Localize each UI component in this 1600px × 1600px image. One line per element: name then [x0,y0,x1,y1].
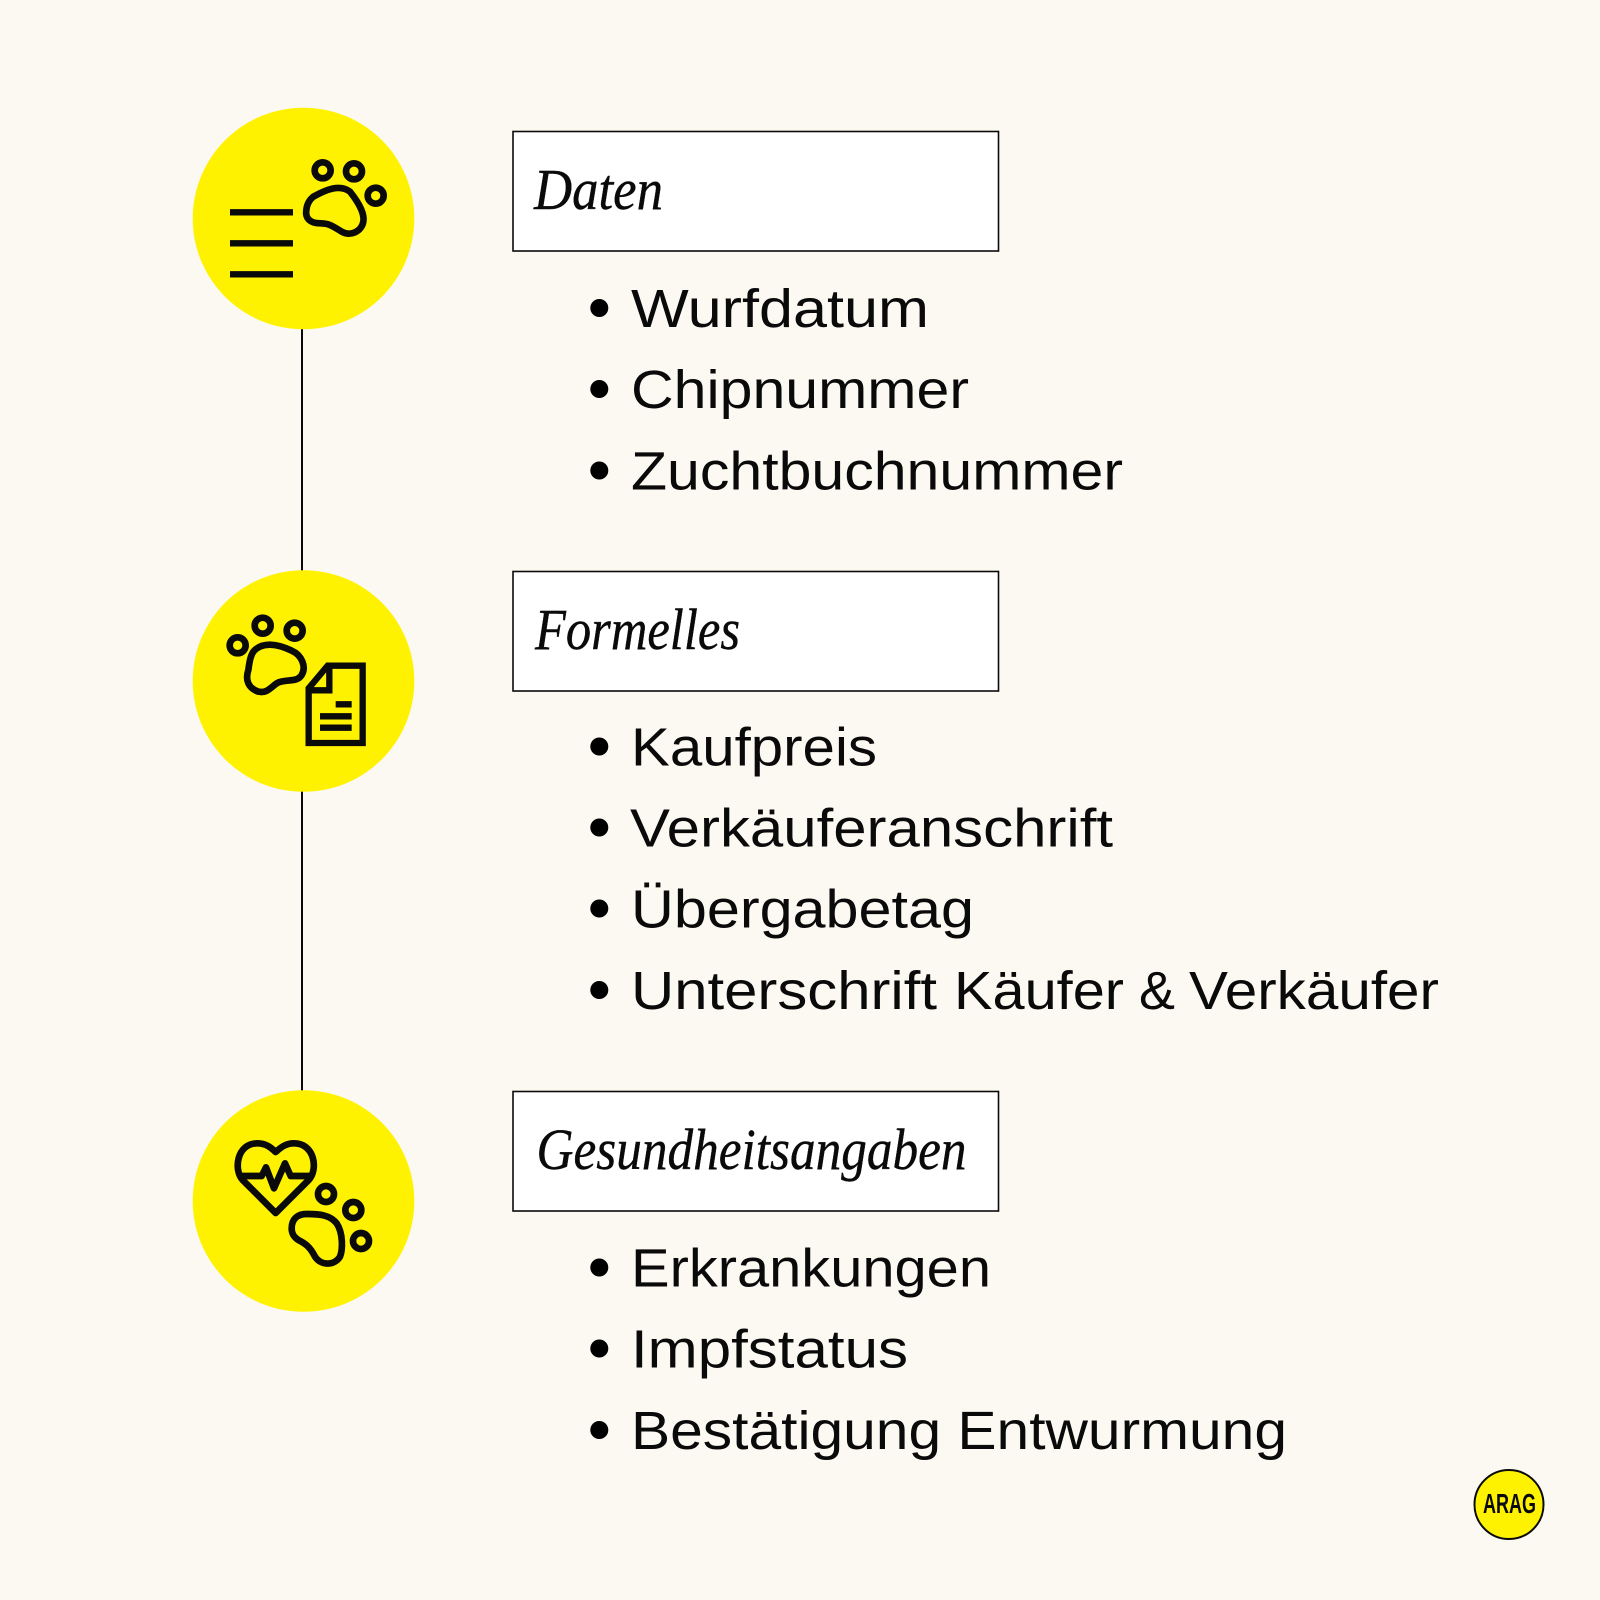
list: Gesundheitsangaben: Erkrankungen [631,1238,991,1298]
icon: paw with document [193,570,414,792]
list: Daten: Wurfdatum [631,279,929,339]
list: Daten [590,279,1123,502]
panel: Daten [193,108,1123,501]
list: Daten: Chipnummer [631,360,969,420]
heading box: Daten: Daten [533,157,663,222]
list: Gesundheitsangaben [590,1238,1287,1461]
list: Gesundheitsangaben: Bestätigung Entwurmung [631,1401,1287,1461]
panel: Gesundheitsangaben [193,1090,1287,1461]
list: Formelles: Übergabetag [631,880,974,940]
logo: ARAG [1474,1470,1544,1539]
heading box: Daten [513,132,998,251]
list: Formelles [590,718,1439,1021]
heading box: Gesundheitsangaben [513,1092,998,1211]
icon: heart with paw [193,1090,414,1312]
icon: list with paw [193,108,414,329]
heading box: Gesundheitsangaben: Gesundheitsangaben [536,1117,966,1182]
heading box: Formelles [513,572,998,691]
list: Gesundheitsangaben: Impfstatus [631,1320,908,1380]
list: Formelles: & [1139,961,1175,1021]
list: Formelles: Käufer [954,961,1124,1021]
list: Formelles: Kaufpreis [631,718,877,778]
logo: ARAG: ARAG [1483,1488,1536,1519]
timeline connector [301,325,303,1095]
panel: Formelles [193,570,1439,1021]
list: Formelles: Unterschrift [631,961,937,1021]
heading box: Formelles: Formelles [534,597,740,662]
list: Daten: Zuchtbuchnummer [631,442,1123,502]
list: Formelles: Verkäuferanschrift [630,798,1113,858]
list: Formelles: Verkäufer [1189,961,1439,1021]
